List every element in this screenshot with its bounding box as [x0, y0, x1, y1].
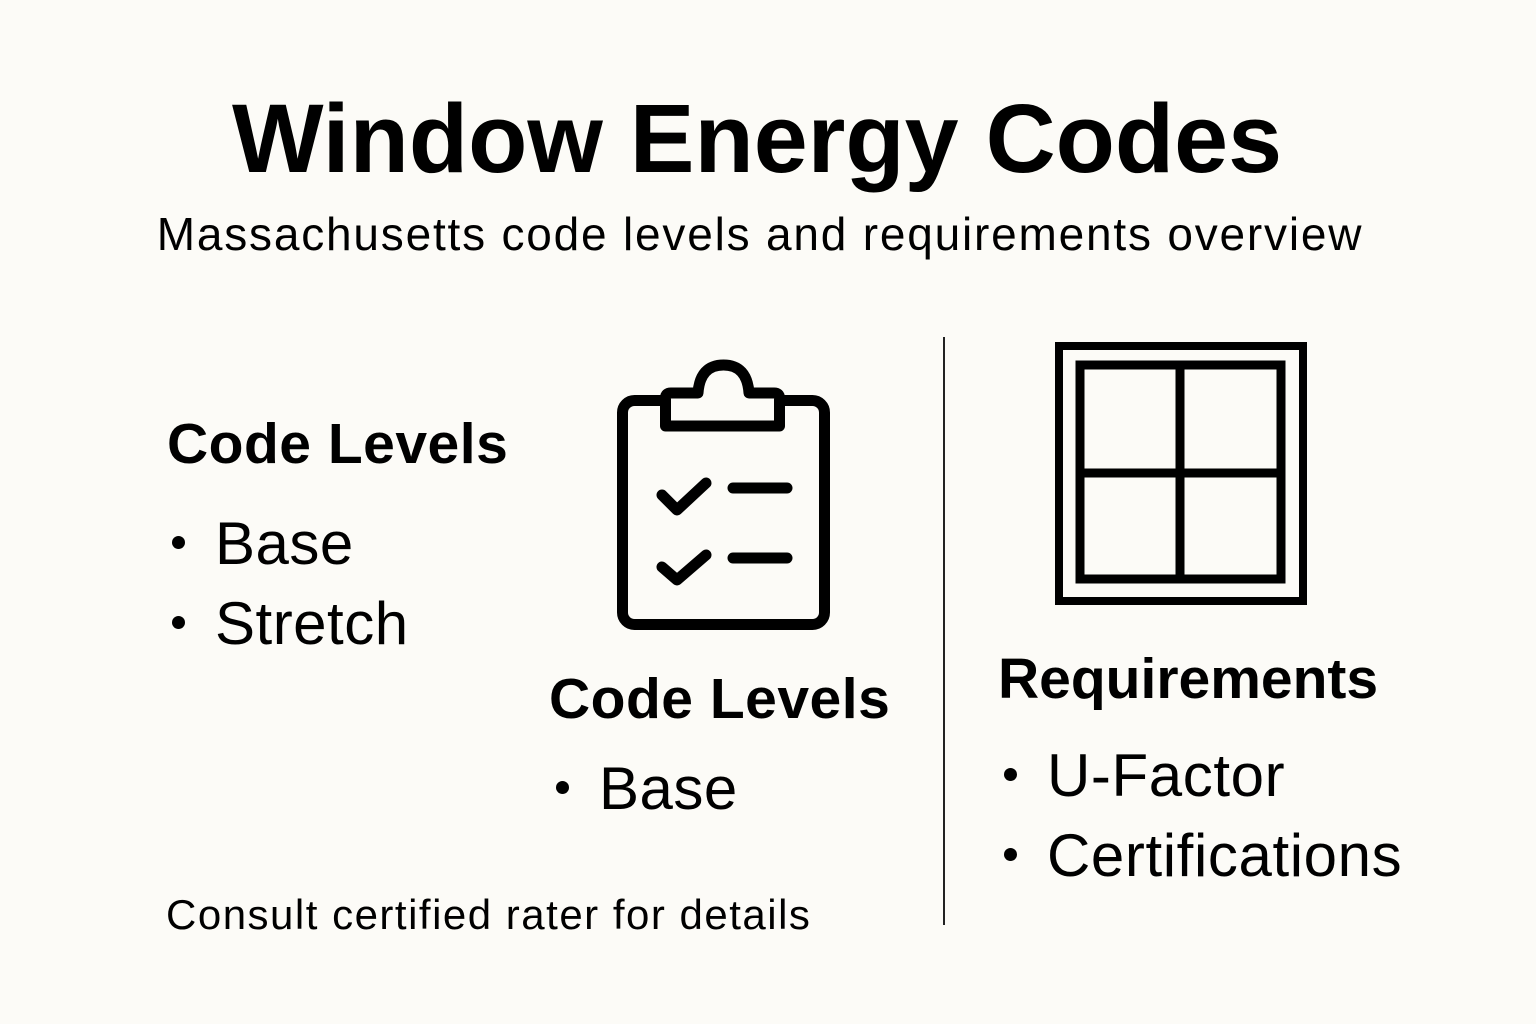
- bullet list: requirements: [1004, 742, 1402, 889]
- bullet list: left levels: [172, 510, 409, 657]
- icon: clipboard: [617, 360, 830, 630]
- bullet list: left levels: Stretch: [215, 590, 409, 657]
- heading: code levels middle: Code Levels: [549, 667, 890, 731]
- icon: window: [1055, 342, 1307, 605]
- bullet list: left levels: Base: [215, 510, 354, 577]
- title: Window Energy Codes: [232, 84, 1282, 193]
- bullet list: middle: Base: [599, 755, 738, 822]
- bullet list: requirements: U-Factor: [1047, 742, 1285, 809]
- divider: [943, 337, 945, 925]
- heading: requirements: Requirements: [998, 647, 1378, 711]
- heading: code levels left: Code Levels: [167, 412, 508, 476]
- bullet list: requirements: Certifications: [1047, 822, 1402, 889]
- subtitle: Massachusetts code levels and requirements overview: [157, 208, 1363, 260]
- footer note: Consult certified rater for details: [166, 891, 811, 938]
